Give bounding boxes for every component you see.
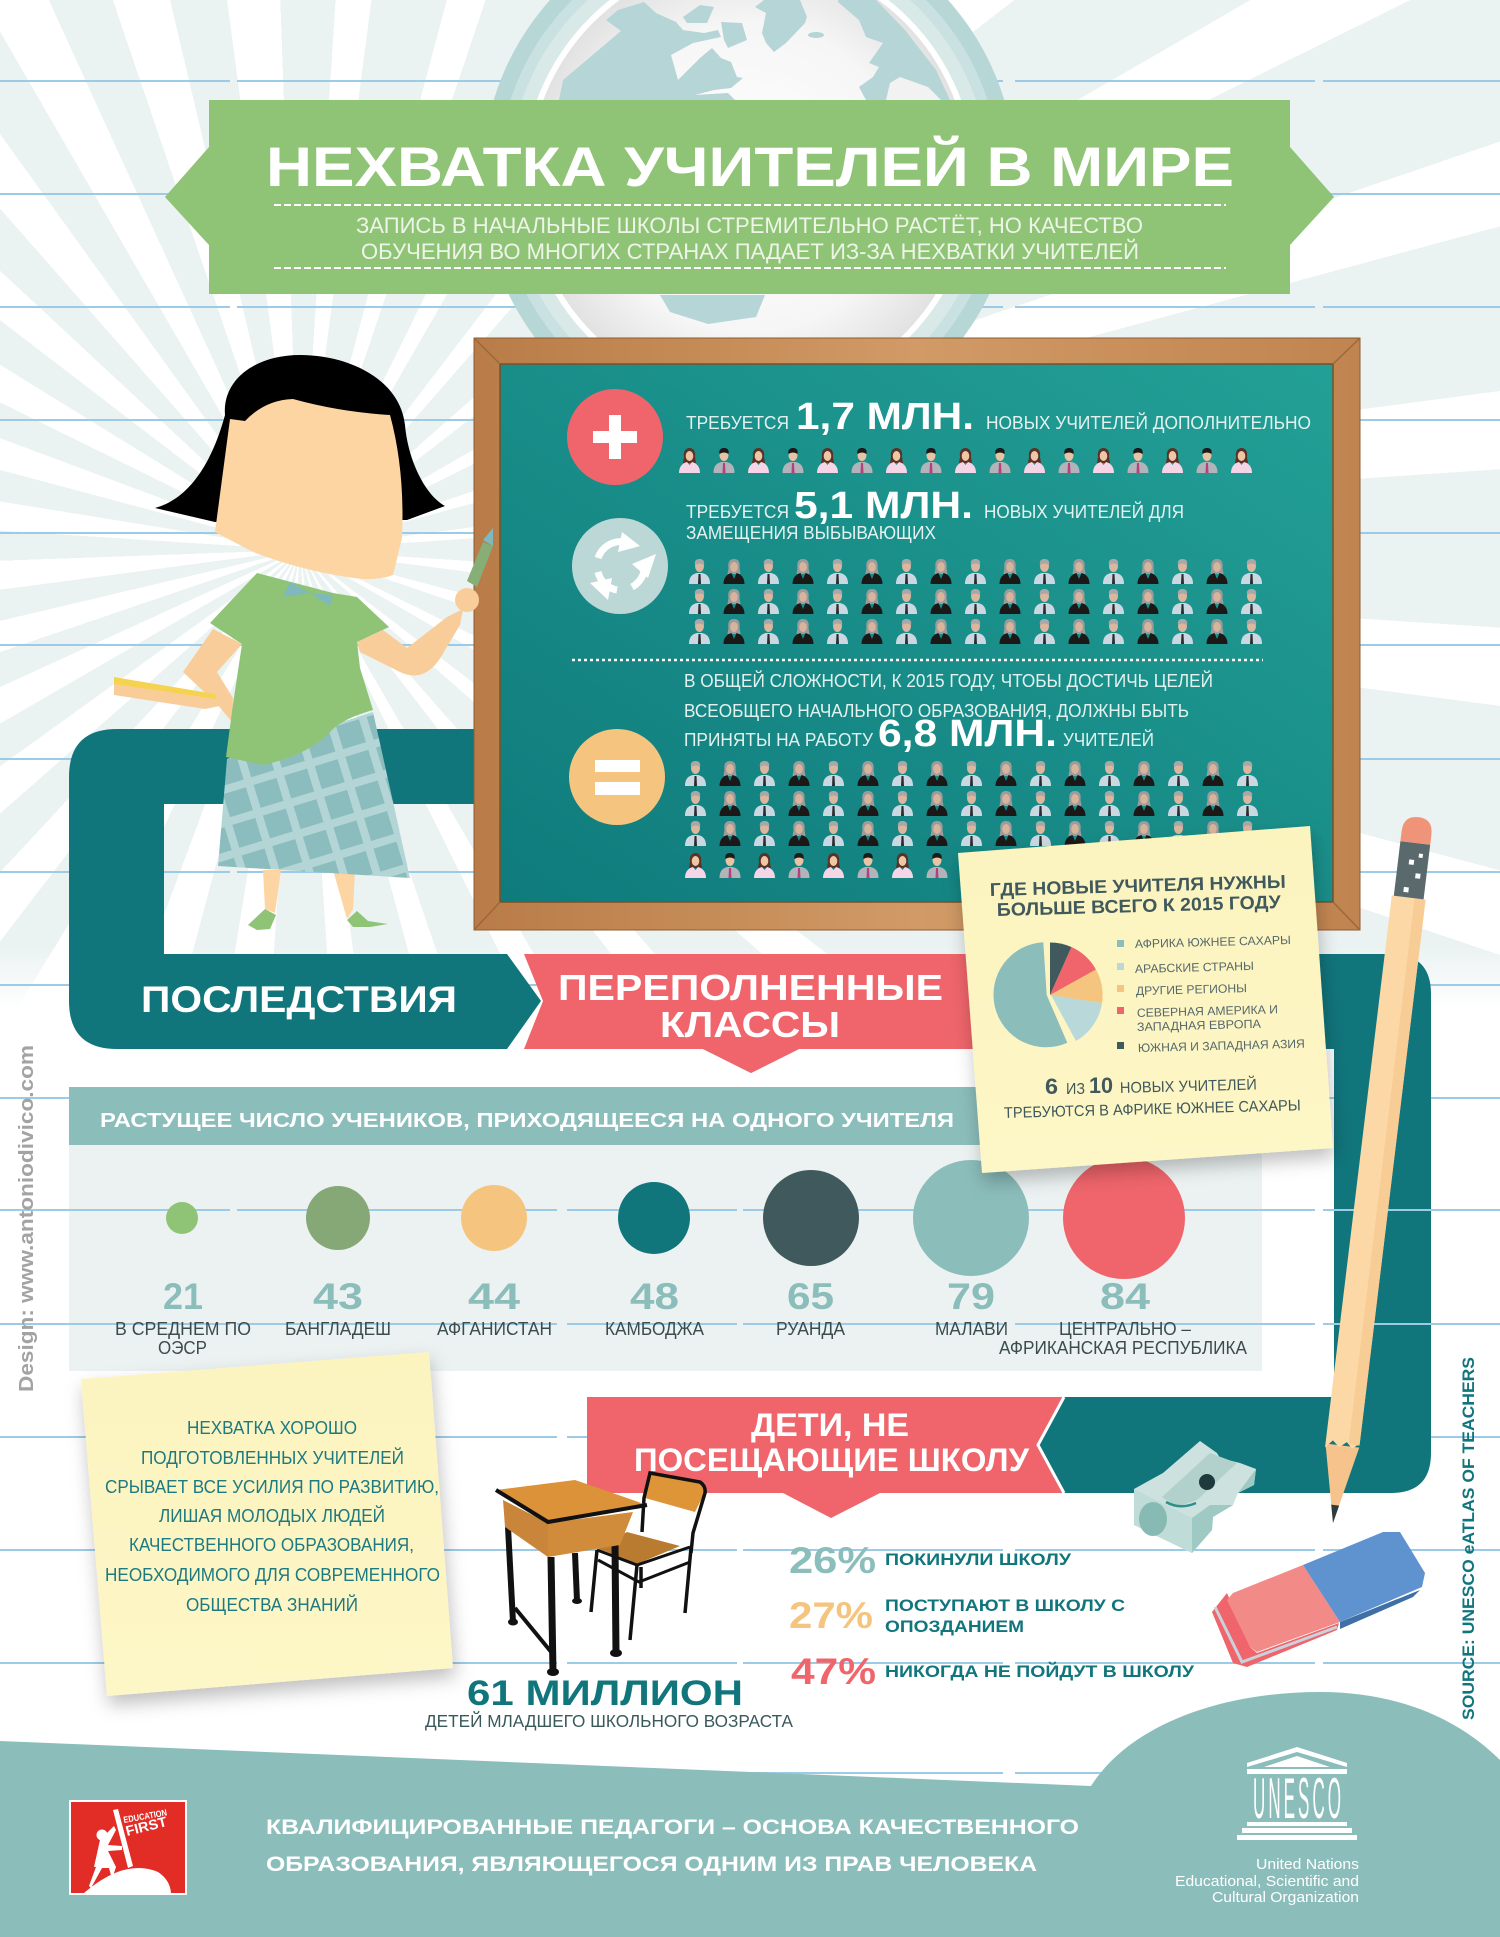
values: 21 [163,1276,203,1317]
legend [1117,933,1305,1055]
text: 6.8 million [684,670,1213,755]
note text: ЛИШАЯ МОЛОДЫХ ЛЮДЕЙ [159,1505,385,1526]
face [215,399,402,579]
note statistic: 10 [1089,1073,1113,1098]
icon: plus [567,389,663,485]
statistics: out of school: ОПОЗДАНИЕМ [885,1617,1024,1636]
legend: ДРУГИЕ РЕГИОНЫ [1136,981,1247,998]
values: 44 [468,1276,521,1317]
sticky note: shortage statement [81,1352,453,1696]
note heading: ГДЕ НОВЫЕ УЧИТЕЛЯ НУЖНЫ [990,871,1286,900]
note text: НЕХВАТКА ХОРОШО [187,1418,357,1438]
country labels: РУАНДА [776,1319,845,1339]
note text [105,1418,440,1615]
title banner [165,100,1334,294]
text: 5.1 million: ТРЕБУЕТСЯ [686,501,789,522]
statistics: out of school: 47% [791,1651,876,1692]
shirt [210,573,389,765]
pictogram: 5.1 million teachers [689,559,1262,644]
statistics: out of school: 26% [789,1540,876,1581]
heading: overcrowded classes: КЛАССЫ [660,1004,840,1045]
note text: СРЫВАЕТ ВСЕ УСИЛИЯ ПО РАЗВИТИЮ, [105,1477,439,1497]
pointing arm and pencil [357,528,493,676]
globe [482,0,1016,445]
values: 79 [947,1276,995,1317]
statistics: out of school: ПОКИНУЛИ ШКОЛУ [885,1550,1071,1569]
subtitle: ЗАПИСЬ В НАЧАЛЬНЫЕ ШКОЛЫ СТРЕМИТЕЛЬНО РАСТЁТ, НО КАЧЕСТВО [356,213,1143,238]
country labels: В СРЕДНЕМ ПО [115,1319,251,1339]
design credit: Design: www.antoniodivico.com [16,1045,38,1392]
footer message: КВАЛИФИЦИРОВАННЫЕ ПЕДАГОГИ – ОСНОВА КАЧЕСТВЕННОГО [266,1815,1079,1839]
logo: education first: FIRST [124,1813,169,1839]
country labels: БАНГЛАДЕШ [285,1319,391,1339]
bow [283,582,333,606]
heading: overcrowded classes: ПЕРЕПОЛНЕННЫЕ [558,967,943,1008]
note statistic: 6 [1045,1074,1058,1099]
heading: ДЕТИ, НЕ [751,1407,909,1443]
ribbon: out of school children [587,1397,1064,1518]
text: 5.1 million: НОВЫХ УЧИТЕЛЕЙ ДЛЯ [984,501,1184,522]
note statistic: ТРЕБУЮТСЯ В АФРИКЕ ЮЖНЕЕ САХАРЫ [1004,1097,1301,1122]
footer message: ОБРАЗОВАНИЯ, ЯВЛЯЮЩЕГОСЯ ОДНИМ ИЗ ПРАВ ЧЕЛОВЕКА [266,1852,1037,1876]
icon: equals [569,729,665,825]
pencil [1316,815,1435,1525]
country labels: АФГАНИСТАН [437,1319,552,1339]
logo: education first [70,1801,186,1894]
text: 6.8 million: 6,8 МЛН. [878,713,1057,755]
heading: overcrowded classes [558,967,943,1045]
note heading [990,871,1286,920]
note text: НЕОБХОДИМОГО ДЛЯ СОВРЕМЕННОГО [105,1565,440,1585]
country labels: ЦЕНТРАЛЬНО – [1059,1319,1191,1339]
values: 43 [313,1276,363,1317]
unesco caption [1175,1857,1359,1906]
text: 5.1 million: ЗАМЕЩЕНИЯ ВЫБЫВАЮЩИХ [686,522,936,543]
consequences bracket and ribbons [69,729,1431,1493]
hair [155,355,445,522]
text: 1.7 million: 1,7 МЛН. [796,396,974,438]
sticky note: where teachers needed [958,826,1333,1173]
statistics: out of school: 27% [789,1595,873,1636]
note statistic: ИЗ [1066,1081,1085,1098]
panel: pupils per teacher [0,1087,1500,1371]
subtitle [356,213,1143,264]
note statistic [1004,1073,1301,1122]
text: 6.8 million: В ОБЩЕЙ СЛОЖНОСТИ, К 2015 ГОДУ, ЧТОБЫ ДОСТИЧЬ ЦЕЛЕЙ [684,670,1213,691]
heading: ПОСЕЩАЮЩИЕ ШКОЛУ [634,1442,1030,1478]
legs and shoes [248,870,388,930]
legend: ЗАПАДНАЯ ЕВРОПА [1137,1017,1261,1034]
source credit: SOURCE: UNESCO eATLAS OF TEACHERS [1459,1357,1478,1720]
heading [634,1407,1030,1478]
note statistic: НОВЫХ УЧИТЕЛЕЙ [1120,1075,1257,1097]
heading: consequences: ПОСЛЕДСТВИЯ [141,979,457,1020]
note text: КАЧЕСТВЕННОГО ОБРАЗОВАНИЯ, [129,1535,414,1555]
text: 1.7 million [686,396,1311,438]
country labels: ОЭСР [158,1338,207,1358]
icon: eraser [1212,1532,1425,1667]
text: 6.8 million: УЧИТЕЛЕЙ [1063,729,1154,750]
statistics: out of school: ПОСТУПАЮТ В ШКОЛУ С [885,1596,1125,1615]
text: 1.7 million: ТРЕБУЕТСЯ [686,412,789,433]
ribbon: overcrowded classes [524,954,1010,1073]
text: 5.1 million: 5,1 МЛН. [794,485,973,527]
footer band [0,1692,1500,1937]
legend: АФРИКА ЮЖНЕЕ САХАРЫ [1135,933,1291,951]
values: 48 [630,1276,679,1317]
text: 6.8 million: ПРИНЯТЫ НА РАБОТУ [684,729,873,750]
statistic: 61 million: 61 МИЛЛИОН [467,1674,743,1713]
skirt [218,712,410,878]
legend: СЕВЕРНАЯ АМЕРИКА И [1137,1002,1278,1020]
bubble chart [166,1157,1185,1279]
title: НЕХВАТКА УЧИТЕЛЕЙ В МИРЕ [266,135,1234,198]
statistics: out of school [789,1540,1194,1692]
country labels: КАМБОДЖА [605,1319,704,1339]
icon: desk and chair [496,1473,705,1676]
ruler and arm [114,629,242,722]
logo: unesco: UNESCO [1253,1766,1341,1832]
pictogram: 6.8 million teachers [685,761,1258,878]
values [163,1276,1151,1317]
values: 65 [787,1276,834,1317]
legend: ЮЖНАЯ И ЗАПАДНАЯ АЗИЯ [1138,1037,1305,1055]
note heading: БОЛЬШЕ ВСЕГО К 2015 ГОДУ [997,891,1282,920]
character: teacher [114,355,493,930]
unesco caption: Educational, Scientific and [1175,1874,1359,1890]
values: 84 [1100,1276,1151,1317]
statistic: 61 million: ДЕТЕЙ МЛАДШЕГО ШКОЛЬНОГО ВОЗРАСТА [425,1710,793,1731]
country labels: МАЛАВИ [935,1319,1008,1339]
footer message [266,1815,1079,1876]
icon: recycle [572,518,668,614]
note text: ОБЩЕСТВА ЗНАНИЙ [186,1594,358,1615]
logo: unesco [1237,1747,1357,1840]
logo: education first: EDUCATION [123,1807,168,1825]
legend: АРАБСКИЕ СТРАНЫ [1135,959,1254,976]
country labels: АФРИКАНСКАЯ РЕСПУБЛИКА [999,1338,1247,1358]
subtitle: ОБУЧЕНИЯ ВО МНОГИХ СТРАНАХ ПАДАЕТ ИЗ-ЗА НЕХВАТКИ УЧИТЕЛЕЙ [361,239,1139,264]
unesco caption: United Nations [1256,1857,1359,1873]
text: 1.7 million: НОВЫХ УЧИТЕЛЕЙ ДОПОЛНИТЕЛЬНО [986,412,1311,433]
panel heading: РАСТУЩЕЕ ЧИСЛО УЧЕНИКОВ, ПРИХОДЯЩЕЕСЯ НА ОДНОГО УЧИТЕЛЯ [100,1110,954,1132]
pictogram: 1.7 million teachers [679,448,1252,473]
pie chart [993,942,1103,1047]
chalkboard [474,338,1360,930]
statistics: out of school: НИКОГДА НЕ ПОЙДУТ В ШКОЛУ [885,1662,1194,1681]
text: 5.1 million [686,485,1184,543]
unesco caption: Cultural Organization [1212,1890,1359,1906]
note text: ПОДГОТОВЛЕННЫХ УЧИТЕЛЕЙ [141,1447,404,1468]
country labels [115,1319,1247,1358]
statistic: 61 million [425,1674,793,1731]
icon: sharpener [1134,1441,1256,1553]
text: 6.8 million: ВСЕОБЩЕГО НАЧАЛЬНОГО ОБРАЗОВАНИЯ, ДОЛЖНЫ БЫТЬ [684,700,1189,721]
